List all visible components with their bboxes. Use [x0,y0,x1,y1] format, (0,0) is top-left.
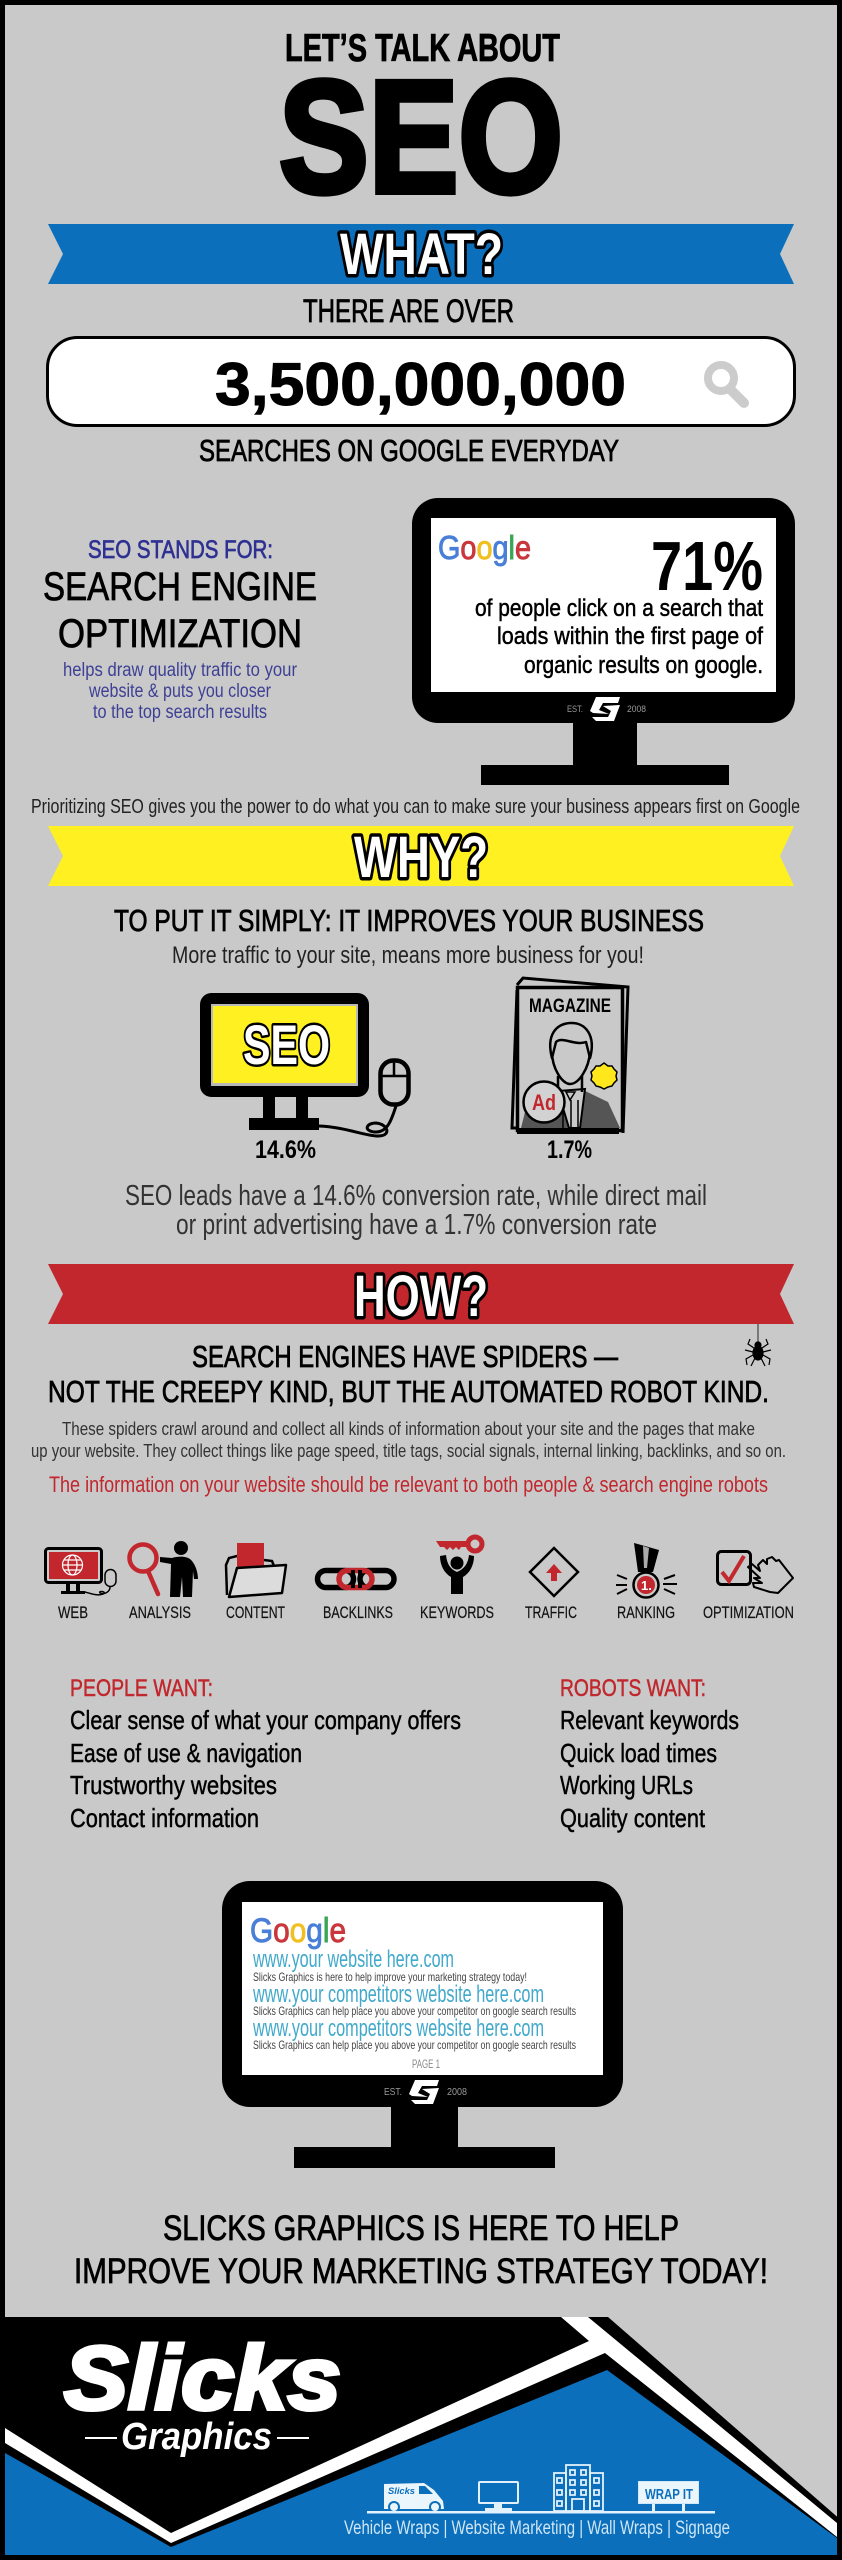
icon row [46,1537,794,1622]
section: why [48,825,794,1241]
icon: ranking: 1. [641,1578,652,1593]
search results: Slicks Graphics can help place you above your competitor on google search results [253,2038,576,2052]
list heading: PEOPLE WANT: [70,1675,213,1702]
heading line two: OPTIMIZATION [58,612,302,656]
brand mark [567,697,646,721]
icon: monitor [479,2482,518,2511]
list items [70,1705,461,1833]
icon: building [554,2465,603,2511]
icon: magazine: Ad [532,1090,556,1115]
paragraph [31,1419,786,1461]
icon: magazine [512,978,628,1134]
icon: keywords [436,1537,482,1594]
list items: Ease of use & navigation [70,1738,302,1768]
banner: what [48,224,794,284]
big number: 3,500,000,000 [215,351,626,418]
list items [560,1705,739,1833]
icon: magnifier [708,365,744,403]
brand mark: EST. [384,2087,402,2098]
icon: content [226,1543,286,1597]
brand mark: EST. [567,704,583,714]
call to action [74,2209,768,2291]
monitor: search results [222,1881,623,2168]
man portrait [521,1023,620,1128]
icon: analysis [130,1541,198,1597]
text: conversion comparison [125,1180,707,1241]
subheading: SEO STANDS FOR: [88,536,273,564]
title [279,27,563,226]
text: searches on google: SEARCHES ON GOOGLE EVERYDAY [199,433,619,468]
description: website & puts you closer [88,681,272,702]
heading: how: HOW? [354,1264,488,1329]
search box [48,338,794,426]
brand mark [384,2080,467,2104]
banner: how [48,1264,794,1324]
stat: print rate: 1.7% [547,1136,592,1164]
services text: Vehicle Wraps | Website Marketing | Wall Wraps | Signage [344,2518,730,2539]
stat description: organic results on google. [524,652,763,679]
list: robots want [560,1675,739,1833]
list items: Trustworthy websites [70,1770,277,1800]
banner: why [48,826,794,886]
label: content: CONTENT [226,1603,285,1622]
icon: seo monitor [206,998,408,1136]
text: more traffic: More traffic to your site, means more business for you! [172,942,644,969]
section: how [31,1264,794,1497]
icon: van [384,2483,444,2512]
label: web: WEB [58,1603,88,1622]
search results: www.your competitors website here.com [252,1981,544,2008]
google logo: Google [438,529,531,566]
icon: spider [745,1324,771,1366]
search results: Slicks Graphics can help place you above your competitor on google search results [253,2004,576,2018]
list: people want [70,1675,461,1833]
title line: LET’S TALK ABOUT [285,27,560,70]
list items: Clear sense of what your company offers [70,1705,461,1735]
panel: seo stands for [43,536,317,723]
ad seal [524,1082,564,1122]
badge [591,1063,617,1089]
stat: 71% [651,527,763,605]
icon: van: Slicks [388,2486,415,2496]
search results: PAGE 1 [412,2057,440,2071]
heading: why: WHY? [354,825,488,890]
text: there are over: THERE ARE OVER [303,293,514,329]
list items: Relevant keywords [560,1705,739,1735]
search results: www.your website here.com [252,1946,454,1973]
title SEO: SEO [279,47,563,226]
label: optimization: OPTIMIZATION [703,1603,794,1622]
stat description [475,595,763,679]
footer [0,2317,842,2560]
icon: seo monitor: SEO [243,1013,330,1076]
description: helps draw quality traffic to your [63,660,298,681]
list items: Quality content [560,1803,706,1833]
label: traffic: TRAFFIC [525,1603,577,1622]
logo: slicks: Slicks [64,2329,341,2429]
label: backlinks: BACKLINKS [323,1603,393,1622]
brand mark: 2008 [627,704,646,714]
icon: mouse [319,1060,408,1136]
heading: what: WHAT? [340,222,503,287]
label: keywords: KEYWORDS [420,1603,494,1622]
icon: ranking [616,1543,677,1598]
stat description: loads within the first page of [497,623,763,650]
icon: sign [638,2482,698,2512]
label: ranking: RANKING [617,1603,675,1622]
search results: www.your competitors website here.com [252,2015,544,2042]
section: what [48,222,794,468]
icon: sign: WRAP IT [645,2486,693,2503]
call to action: SLICKS GRAPHICS IS HERE TO HELP [163,2209,679,2248]
text: conversion comparison: or print advertising have a 1.7% conversion rate [176,1209,657,1241]
list items: Working URLs [560,1770,693,1800]
list heading: ROBOTS WANT: [560,1675,706,1702]
heading line one: SEARCH ENGINE [43,565,317,609]
description [63,660,298,723]
icon: optimization [718,1552,793,1593]
list items: Contact information [70,1803,259,1833]
heading lines: SEARCH ENGINES HAVE SPIDERS — [192,1339,618,1374]
ground line [367,2511,715,2514]
icon: backlinks [318,1570,394,1588]
icon: web [46,1548,116,1595]
description: to the top search results [93,702,267,723]
subheading: TO PUT IT SIMPLY: IT IMPROVES YOUR BUSINESS [114,903,704,938]
monitor: 71 percent [412,498,795,785]
label: analysis: ANALYSIS [129,1603,191,1622]
search results [252,1946,576,2071]
google logo: Google [250,1912,346,1950]
logo: graphics: Graphics [121,2416,272,2458]
brand mark: 2008 [447,2087,467,2098]
icon: traffic [530,1548,578,1596]
search results: Slicks Graphics is here to help improve your marketing strategy today! [253,1970,527,1984]
list items: Quick load times [560,1738,717,1768]
stat description: of people click on a search that [475,595,763,622]
stat: seo rate: 14.6% [255,1136,316,1164]
magazine title: MAGAZINE [529,996,611,1017]
